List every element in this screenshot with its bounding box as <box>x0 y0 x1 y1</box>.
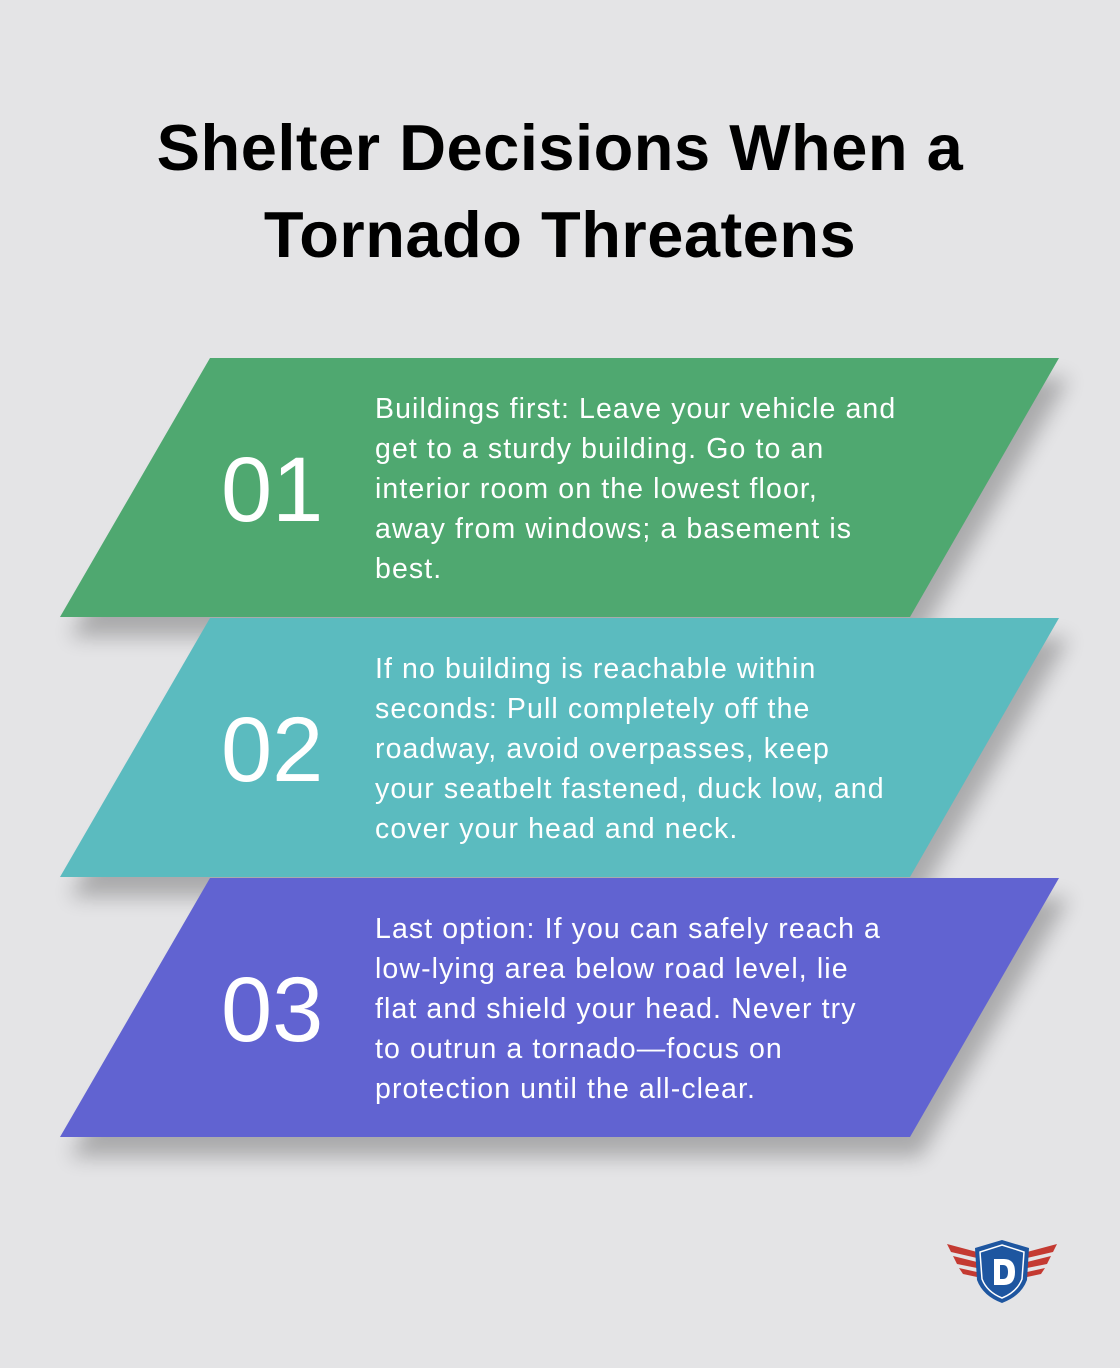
text 3: flat and shield your head. Never try <box>375 993 857 1025</box>
text 2 <box>375 653 885 845</box>
text 3: Last option: If you can safely reach a <box>375 913 881 945</box>
number 02: 02 <box>221 699 323 801</box>
text 1: get to a sturdy building. Go to an <box>375 433 824 465</box>
panel 2 shape <box>60 618 1069 897</box>
text 1: best. <box>375 553 442 585</box>
text 3 <box>375 913 881 1105</box>
text 2: seconds: Pull completely off the <box>375 693 810 725</box>
text 1: away from windows; a basement is <box>375 513 852 545</box>
text 3: low-lying area below road level, lie <box>375 953 849 985</box>
number 03: 03 <box>221 959 323 1061</box>
text 1: interior room on the lowest floor, <box>375 473 818 505</box>
text 1 <box>375 393 896 585</box>
text 2: If no building is reachable within <box>375 653 816 685</box>
text 2: cover your head and neck. <box>375 813 738 845</box>
panel 1 shape <box>60 358 1069 637</box>
number 01: 01 <box>221 439 323 541</box>
text 2: your seatbelt fastened, duck low, and <box>375 773 885 805</box>
title: Shelter Decisions When a <box>157 111 963 184</box>
text 3: protection until the all-clear. <box>375 1073 756 1105</box>
title <box>157 111 964 271</box>
logo <box>947 1240 1057 1303</box>
panel 3 shape <box>60 878 1069 1157</box>
title: Tornado Threatens <box>264 198 856 271</box>
text 3: to outrun a tornado—focus on <box>375 1033 783 1065</box>
text 1: Buildings first: Leave your vehicle and <box>375 393 896 425</box>
text 2: roadway, avoid overpasses, keep <box>375 733 830 765</box>
